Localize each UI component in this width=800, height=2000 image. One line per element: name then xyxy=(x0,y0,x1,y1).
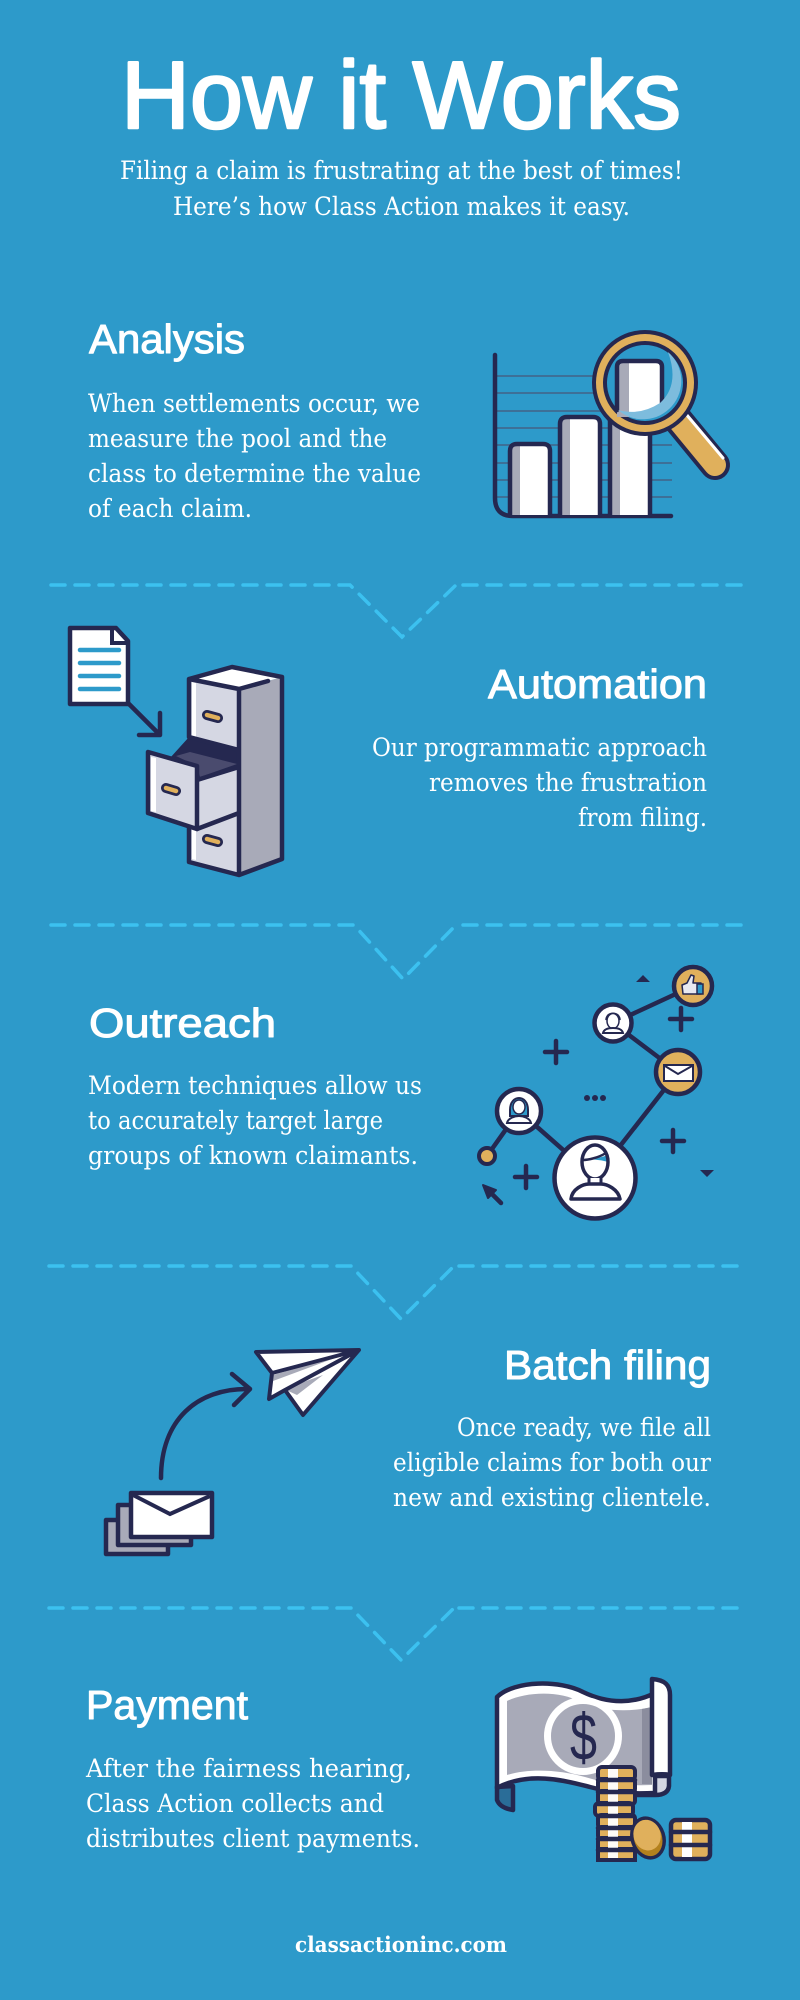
heading: Automation: Automation xyxy=(488,661,707,707)
envelopes xyxy=(106,1493,212,1554)
node: man xyxy=(594,1004,632,1042)
text: Automation description: Our programmatic approach xyxy=(372,733,707,762)
divider 3 xyxy=(49,1266,740,1319)
text: Batch filing description: Once ready, we file all xyxy=(457,1413,711,1442)
tall coin stack xyxy=(595,1767,635,1860)
icon: envelopes and paper plane xyxy=(106,1350,359,1554)
subtitle: Here’s how Class Action makes it easy. xyxy=(173,192,630,221)
divider 4 xyxy=(49,1608,740,1660)
subtitle xyxy=(120,156,683,221)
text: Payment description: Class Action collects and xyxy=(86,1789,384,1818)
icon: banknote and coins xyxy=(497,1679,710,1864)
title: How it Works xyxy=(121,42,681,149)
text: Automation description: from filing. xyxy=(578,803,707,832)
arrow xyxy=(129,704,160,735)
node: woman xyxy=(497,1089,541,1133)
curved arrow xyxy=(161,1374,250,1478)
open drawer xyxy=(148,752,197,829)
subtitle: Filing a claim is frustrating at the best of times! xyxy=(120,156,683,185)
banknote xyxy=(497,1679,670,1810)
cursor arrow xyxy=(483,1185,501,1203)
icon: network of people xyxy=(479,967,714,1218)
text: Outreach description: to accurately target large xyxy=(88,1106,383,1135)
text: Analysis description xyxy=(88,389,421,523)
icon: document into filing cabinet xyxy=(70,628,282,875)
ellipsis dots xyxy=(584,1095,606,1101)
magnifier lens xyxy=(592,330,698,436)
text: Payment description xyxy=(85,1754,420,1853)
heading: Outreach: Outreach xyxy=(89,1000,276,1046)
text: Automation description xyxy=(372,733,707,832)
footer url: classactioninc.com xyxy=(295,1932,507,1957)
single coin xyxy=(625,1812,671,1864)
divider 2 xyxy=(51,925,742,979)
drawer handles xyxy=(166,715,218,842)
text: Automation description: removes the frustration xyxy=(429,768,707,797)
text: Batch filing description: eligible claims for both our xyxy=(393,1448,711,1477)
document xyxy=(70,628,128,704)
small coin stack xyxy=(671,1820,710,1859)
small triangles xyxy=(636,975,714,1177)
text: Analysis description: of each claim. xyxy=(88,494,252,523)
node: thumbs up xyxy=(674,967,712,1005)
plus signs xyxy=(515,1008,692,1188)
cabinet xyxy=(170,667,282,875)
heading: Batch filing: Batch filing xyxy=(504,1342,711,1388)
paper plane xyxy=(256,1350,359,1415)
text: Outreach description xyxy=(88,1071,422,1170)
divider 1 xyxy=(51,585,742,637)
text: Outreach description: groups of known claimants. xyxy=(88,1141,418,1170)
magnifier handle xyxy=(678,414,723,465)
text: Analysis description: When settlements occur, we xyxy=(88,389,420,418)
dollar sign: $ xyxy=(570,1700,597,1774)
text: Batch filing description: new and existing clientele. xyxy=(393,1483,711,1512)
text: Analysis description: measure the pool and the xyxy=(88,424,387,453)
text: Outreach description: Modern techniques allow us xyxy=(88,1071,422,1100)
node: big person xyxy=(554,1138,636,1218)
text: Payment description: After the fairness hearing, xyxy=(85,1754,412,1783)
gold dot xyxy=(479,1148,495,1164)
icon: bar chart with magnifying glass xyxy=(495,330,723,516)
chart bars xyxy=(510,400,650,515)
text: Batch filing description xyxy=(393,1413,711,1512)
heading: Analysis: Analysis xyxy=(89,316,245,362)
node: mail xyxy=(656,1050,700,1094)
text: Payment description: distributes client payments. xyxy=(86,1824,420,1853)
heading: Payment: Payment xyxy=(86,1682,249,1728)
text: Analysis description: class to determine the value xyxy=(88,459,421,488)
